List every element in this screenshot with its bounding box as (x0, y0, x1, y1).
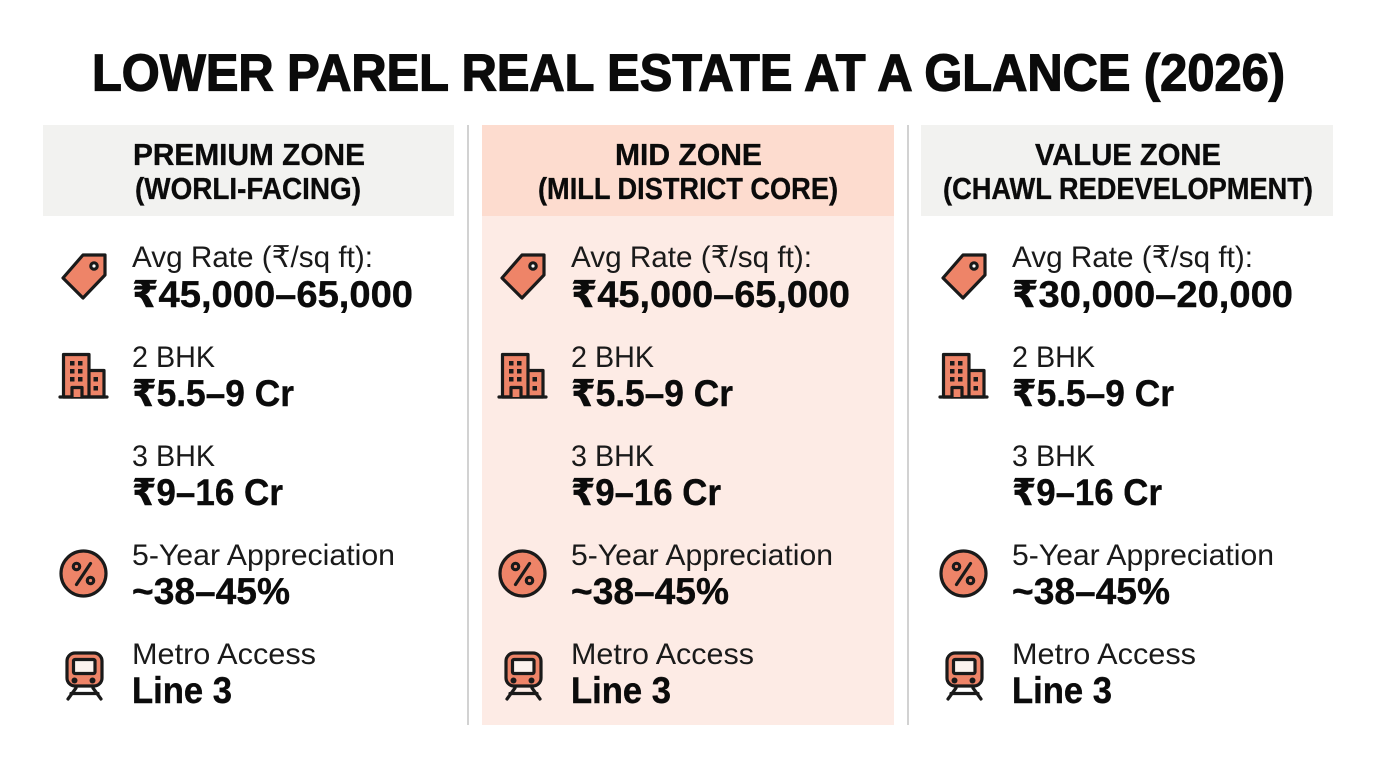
appreciation (1012, 539, 1274, 612)
3 BHK price (571, 440, 721, 513)
metro access: Metro Access (1012, 638, 1196, 671)
icon: percent (61, 551, 106, 596)
icon: metro train (947, 653, 982, 699)
appreciation (132, 539, 395, 612)
premium zone header: PREMIUM ZONE (133, 137, 365, 172)
value zone header: VALUE ZONE (1035, 137, 1221, 172)
2 BHK price (1012, 341, 1174, 414)
icon: percent (500, 551, 545, 596)
icon: price tag (63, 255, 105, 298)
appreciation (571, 539, 833, 612)
2 BHK price: ₹5.5–9 Cr (571, 373, 733, 414)
metro access (571, 638, 754, 711)
icon: building (499, 354, 546, 397)
3 BHK price: 3 BHK (1012, 440, 1095, 473)
title: LOWER PAREL REAL ESTATE AT A GLANCE (2026) (92, 44, 1285, 102)
premium zone header (43, 125, 454, 216)
3 BHK price: 3 BHK (571, 440, 654, 473)
panel: premium zone (43, 125, 454, 711)
metro access (1012, 638, 1196, 711)
average rate: ₹45,000–65,000 (571, 274, 850, 315)
average rate: ₹45,000–65,000 (132, 274, 413, 315)
2 BHK price: 2 BHK (571, 341, 654, 374)
icon: price tag (943, 255, 985, 298)
mid zone body background (482, 216, 894, 725)
3 BHK price (132, 440, 283, 513)
icon: percent (941, 551, 986, 596)
average rate: Avg Rate (₹/sq ft): (1012, 241, 1253, 274)
appreciation: 5-Year Appreciation (1012, 539, 1274, 572)
3 BHK price: ₹9–16 Cr (1012, 472, 1162, 513)
appreciation: ~38–45% (132, 571, 290, 612)
panel: mid zone (482, 125, 894, 725)
average rate (571, 241, 850, 315)
mid zone header (482, 125, 894, 216)
average rate: Avg Rate (₹/sq ft): (571, 241, 812, 274)
average rate (1012, 241, 1293, 315)
2 BHK price: 2 BHK (1012, 341, 1095, 374)
value zone header (921, 125, 1333, 216)
appreciation: ~38–45% (1012, 571, 1170, 612)
mid zone header: (MILL DISTRICT CORE) (538, 171, 838, 206)
metro access: Line 3 (132, 670, 232, 711)
metro access: Line 3 (1012, 670, 1112, 711)
appreciation: 5-Year Appreciation (132, 539, 395, 572)
2 BHK price: ₹5.5–9 Cr (1012, 373, 1174, 414)
metro access (132, 638, 316, 711)
2 BHK price: 2 BHK (132, 341, 215, 374)
metro access: Line 3 (571, 670, 671, 711)
2 BHK price (132, 341, 294, 414)
metro access: Metro Access (132, 638, 316, 671)
average rate: ₹30,000–20,000 (1012, 274, 1293, 315)
icon: building (60, 354, 107, 397)
icon: price tag (502, 255, 544, 298)
value zone header: (CHAWL REDEVELOPMENT) (943, 171, 1313, 206)
average rate (132, 241, 413, 315)
icon: metro train (506, 653, 541, 699)
icon: building (940, 354, 987, 397)
appreciation: ~38–45% (571, 571, 729, 612)
2 BHK price: ₹5.5–9 Cr (132, 373, 294, 414)
icon: metro train (67, 653, 102, 699)
panel: value zone (921, 125, 1333, 711)
appreciation: 5-Year Appreciation (571, 539, 833, 572)
2 BHK price (571, 341, 733, 414)
3 BHK price: ₹9–16 Cr (571, 472, 721, 513)
premium zone header: (WORLI-FACING) (135, 171, 361, 206)
3 BHK price: ₹9–16 Cr (132, 472, 283, 513)
average rate: Avg Rate (₹/sq ft): (132, 241, 373, 274)
3 BHK price (1012, 440, 1162, 513)
mid zone header: MID ZONE (615, 137, 762, 172)
3 BHK price: 3 BHK (132, 440, 215, 473)
metro access: Metro Access (571, 638, 754, 671)
